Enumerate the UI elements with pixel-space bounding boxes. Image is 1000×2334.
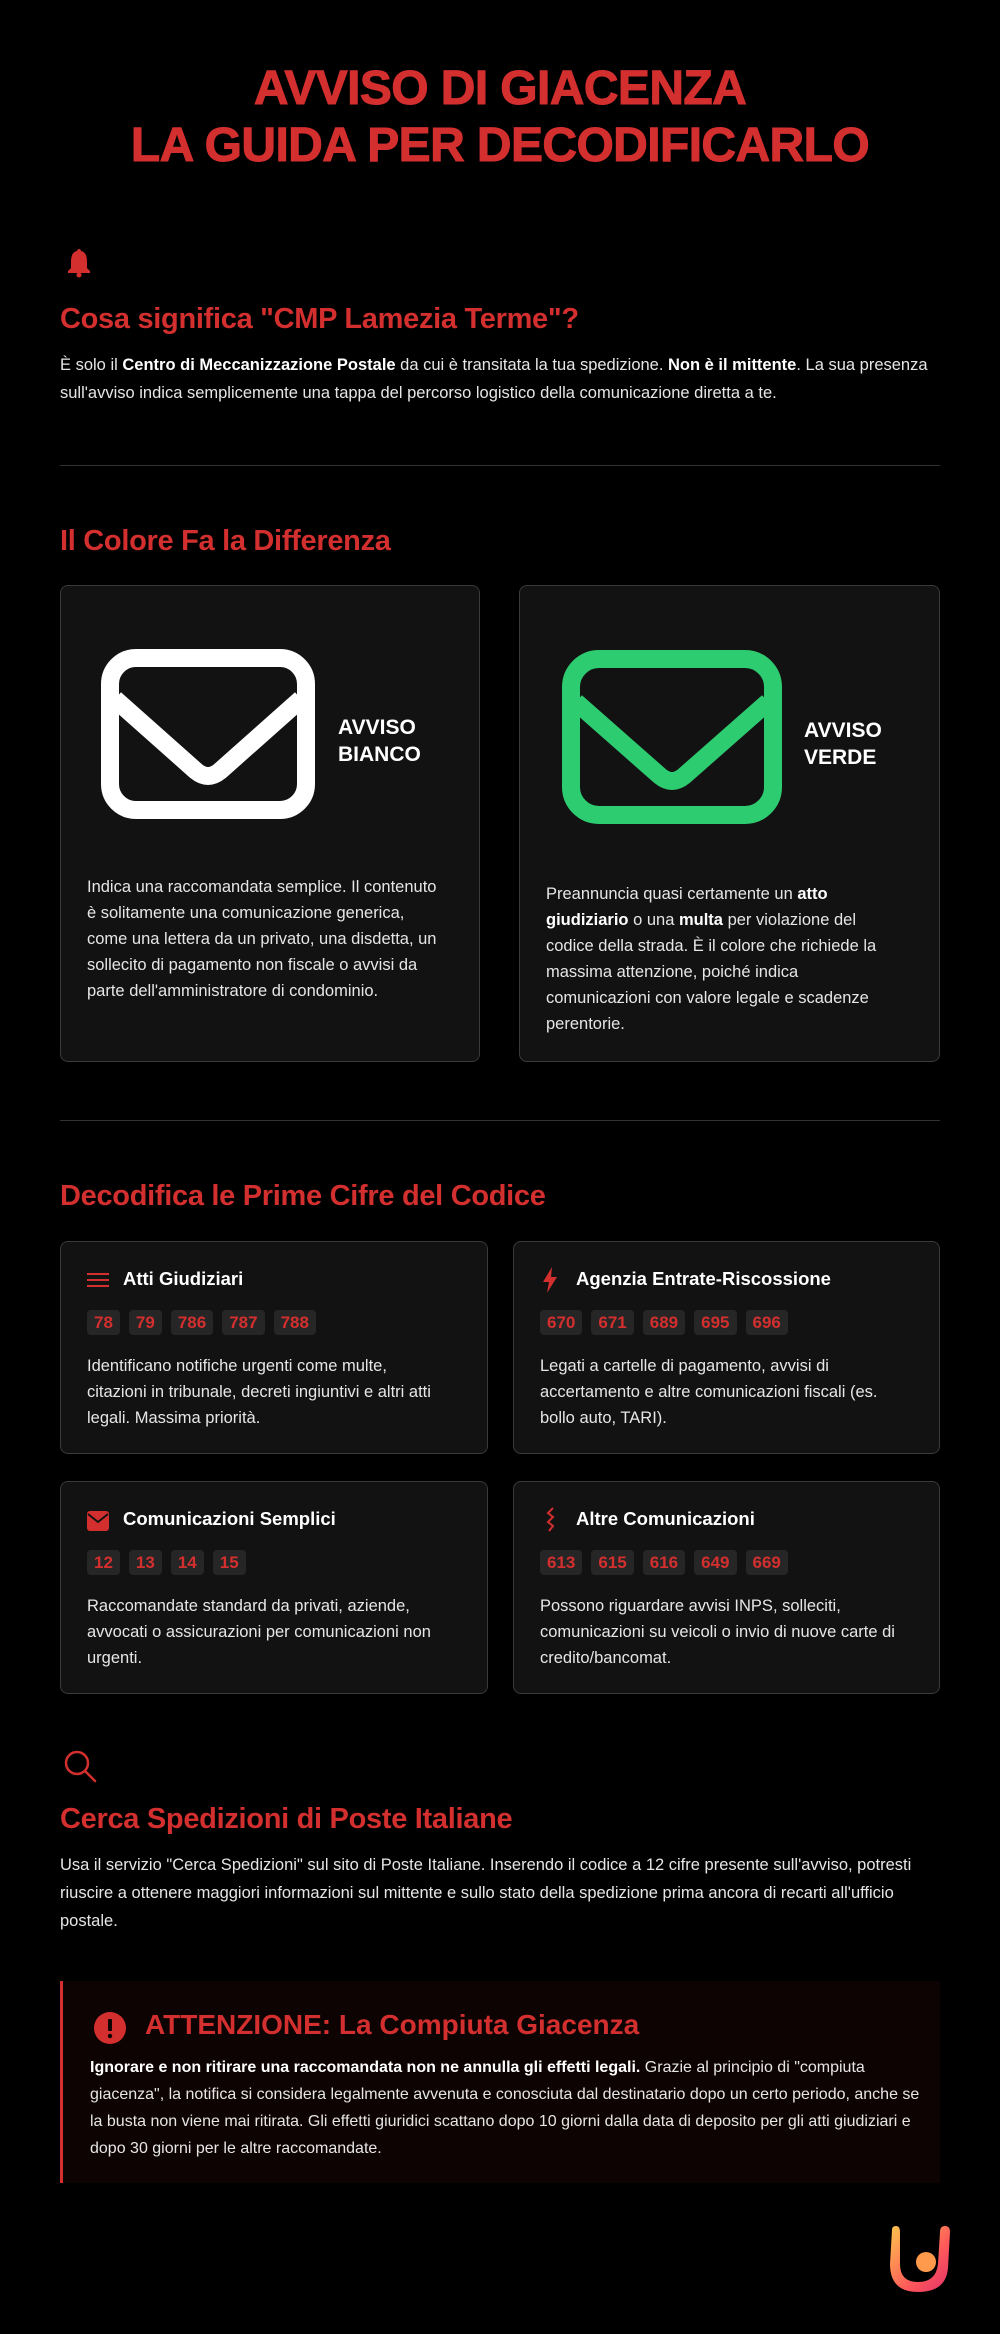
text: verde description: Preannuncia quasi certamente un atto giudiziario o una multa per violazione del codice della strada. È il colore che richiede la massima attenzione, poiché indica comunicazioni con valore legale e scadenze perentorie. xyxy=(546,885,876,1033)
code pills: 787 xyxy=(229,1313,258,1332)
icon: lightning xyxy=(543,1267,557,1293)
code pills: 669 xyxy=(752,1553,781,1572)
callout heading: ATTENZIONE: La Compiuta Giacenza xyxy=(145,2009,639,2040)
icon: search xyxy=(64,1750,96,1782)
text: cerca spedizioni: Usa il servizio "Cerca Spedizioni" sul sito di Poste Italiane. Inserendo il codice a 12 cifre presente sull'avviso, potresti riuscire a ottenere maggiori informazioni sul mittente e sullo stato della spedizione prima ancora di recarti all'ufficio postale. xyxy=(60,1856,911,1930)
panel: avviso bianco xyxy=(60,585,480,1062)
code pills: 79 xyxy=(136,1313,155,1332)
code pills: 695 xyxy=(701,1313,730,1332)
card text: Legati a cartelle di pagamento, avvisi di accertamento e altre comunicazioni fiscali (es. bollo auto, TARI). xyxy=(540,1357,877,1427)
panel: altre comunicazioni xyxy=(513,1481,940,1694)
code pills: 788 xyxy=(281,1313,309,1332)
logo xyxy=(890,2226,950,2292)
label: avviso verde: AVVISO xyxy=(804,719,882,742)
card text: Possono riguardare avvisi INPS, solleciti, comunicazioni su veicoli o invio di nuove carte di credito/bancomat. xyxy=(540,1597,895,1667)
code pills: 13 xyxy=(136,1553,155,1572)
code pills: 14 xyxy=(178,1553,197,1572)
panel: avviso verde xyxy=(519,585,940,1062)
icon: green envelope xyxy=(562,650,782,824)
text: bianco description: Indica una raccomandata semplice. Il contenuto è solitamente una comunicazione generica, come una lettera da un privato, una disdetta, un sollecito di pagamento non fiscale o avvisi da parte dell'amministratore di condominio. xyxy=(87,878,436,1000)
code pills xyxy=(540,1310,788,1335)
heading: decodifica: Decodifica le Prime Cifre del Codice xyxy=(60,1180,546,1212)
heading: colore: Il Colore Fa la Differenza xyxy=(60,525,391,557)
code pills: 613 xyxy=(547,1553,575,1572)
card title: Atti Giudiziari xyxy=(123,1268,243,1289)
heading: cerca spedizioni: Cerca Spedizioni di Poste Italiane xyxy=(60,1803,512,1835)
code pills: 649 xyxy=(701,1553,730,1572)
panel: agenzia entrate xyxy=(513,1241,940,1454)
heading: CMP: Cosa significa "CMP Lamezia Terme"? xyxy=(60,303,579,335)
card title: Altre Comunicazioni xyxy=(576,1508,755,1529)
code pills xyxy=(87,1310,316,1335)
icon: lines xyxy=(87,1273,109,1287)
code pills: 670 xyxy=(547,1313,575,1332)
code pills: 689 xyxy=(650,1313,678,1332)
callout text: Ignorare e non ritirare una raccomandata non ne annulla gli effetti legali. Grazie al principio di "compiuta giacenza", la notifica si considera legalmente avvenuta e conosciuta dal destinatario dopo un certo periodo, anche se la busta non viene mai ritirata. Gli effetti giuridici scattano dopo 10 giorni dalla data di deposito per gli atti giudiziari e dopo 30 giorni per le altre raccomandate. xyxy=(90,2059,919,2157)
code pills: 615 xyxy=(598,1553,627,1572)
text: CMP explanation: È solo il Centro di Meccanizzazione Postale da cui è transitata la tua spedizione. Non è il mittente. La sua presenza sull'avviso indica semplicemente una tappa del percorso logistico della comunicazione diretta a te. xyxy=(60,356,928,402)
code pills: 12 xyxy=(94,1553,113,1572)
icon: bell xyxy=(68,249,90,278)
icon: envelope xyxy=(87,1511,109,1531)
code pills: 15 xyxy=(220,1553,239,1572)
card text: Identificano notifiche urgenti come multe, citazioni in tribunale, decreti ingiuntivi e altri atti legali. Massima priorità. xyxy=(87,1357,431,1427)
title xyxy=(131,62,869,172)
title: LA GUIDA PER DECODIFICARLO xyxy=(131,119,869,172)
code pills: 696 xyxy=(752,1313,781,1332)
card title: Agenzia Entrate-Riscossione xyxy=(576,1268,831,1289)
icon: white envelope xyxy=(101,649,315,819)
label: avviso bianco xyxy=(338,716,421,766)
code pills: 78 xyxy=(94,1313,113,1332)
panel: atti giudiziari xyxy=(60,1241,488,1454)
code pills: 616 xyxy=(650,1553,678,1572)
panel: comunicazioni semplici xyxy=(60,1481,488,1694)
callout: attenzione xyxy=(60,1981,940,2183)
card text: Raccomandate standard da privati, aziende, avvocati o assicurazioni per comunicazioni non urgenti. xyxy=(87,1597,431,1667)
icon: squiggle xyxy=(546,1507,554,1532)
code pills: 786 xyxy=(178,1313,206,1332)
code pills xyxy=(87,1550,246,1575)
code pills xyxy=(540,1550,788,1575)
label: avviso verde xyxy=(804,719,882,769)
card title: Comunicazioni Semplici xyxy=(123,1508,336,1529)
code pills: 671 xyxy=(598,1313,627,1332)
icon: warning circle xyxy=(94,2012,126,2044)
label: avviso bianco: BIANCO xyxy=(338,743,421,766)
title: AVVISO DI GIACENZA xyxy=(254,62,746,115)
label: avviso verde: VERDE xyxy=(804,746,876,769)
label: avviso bianco: AVVISO xyxy=(338,716,416,739)
